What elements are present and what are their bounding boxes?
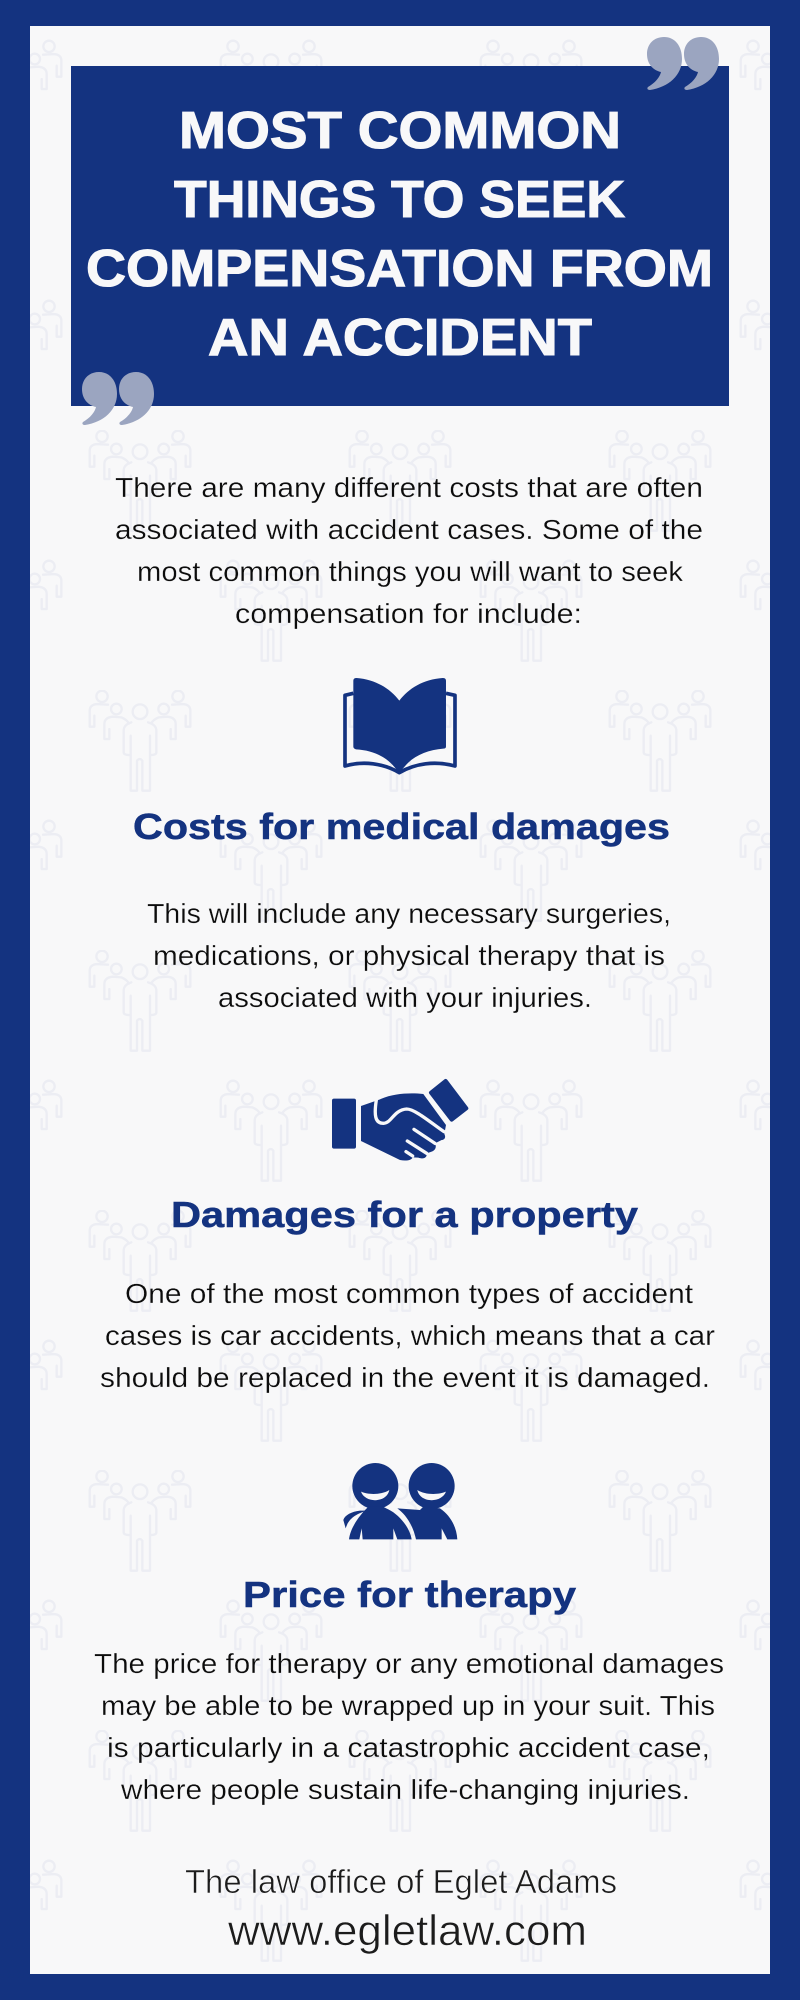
title: THINGS TO SEEK	[174, 171, 625, 229]
text: therapy description: is particularly in a catastrophic accident case,	[107, 1732, 710, 1763]
title: AN ACCIDENT	[208, 309, 592, 367]
text: therapy description: may be able to be wrapped up in your suit. This	[101, 1690, 715, 1721]
intro paragraph: compensation for include:	[235, 598, 582, 629]
intro paragraph: There are many different costs that are often	[115, 472, 703, 503]
icon: open book	[345, 678, 455, 773]
title: COMPENSATION FROM	[86, 240, 713, 298]
text: medical damages description: This will include any necessary surgeries,	[147, 898, 671, 929]
title: MOST COMMON	[179, 102, 621, 160]
icon: handshake	[332, 1081, 466, 1161]
heading: price for therapy: Price for therapy	[243, 1574, 576, 1615]
intro paragraph: most common things you will want to seek	[137, 556, 684, 587]
icon: top right quotation mark	[647, 37, 719, 90]
heading: damages for a property: Damages for a property	[171, 1194, 638, 1235]
intro paragraph: associated with accident cases. Some of the	[115, 514, 703, 545]
intro paragraph	[115, 472, 703, 629]
heading: costs for medical damages: Costs for medical damages	[133, 806, 670, 847]
panel: title block	[71, 66, 729, 406]
footer: website: www.egletlaw.com	[227, 1907, 587, 1955]
text: property description: cases is car accidents, which means that a car	[105, 1320, 715, 1351]
text: property description	[100, 1278, 715, 1393]
text: medical damages description: associated with your injuries.	[218, 982, 592, 1013]
icon: two smiling people	[343, 1463, 457, 1539]
text: therapy description: The price for therapy or any emotional damages	[94, 1648, 724, 1679]
text: medical damages description: medications, or physical therapy that is	[153, 940, 665, 971]
text: medical damages description	[147, 898, 671, 1013]
text: property description: should be replaced in the event it is damaged.	[100, 1362, 710, 1393]
icon: bottom left quotation mark	[82, 372, 154, 425]
footer: law office name: The law office of Eglet Adams	[185, 1863, 617, 1900]
title	[86, 102, 713, 367]
text: therapy description: where people sustain life-changing injuries.	[120, 1774, 690, 1805]
text: property description: One of the most common types of accident	[125, 1278, 693, 1309]
text: therapy description	[94, 1648, 724, 1805]
